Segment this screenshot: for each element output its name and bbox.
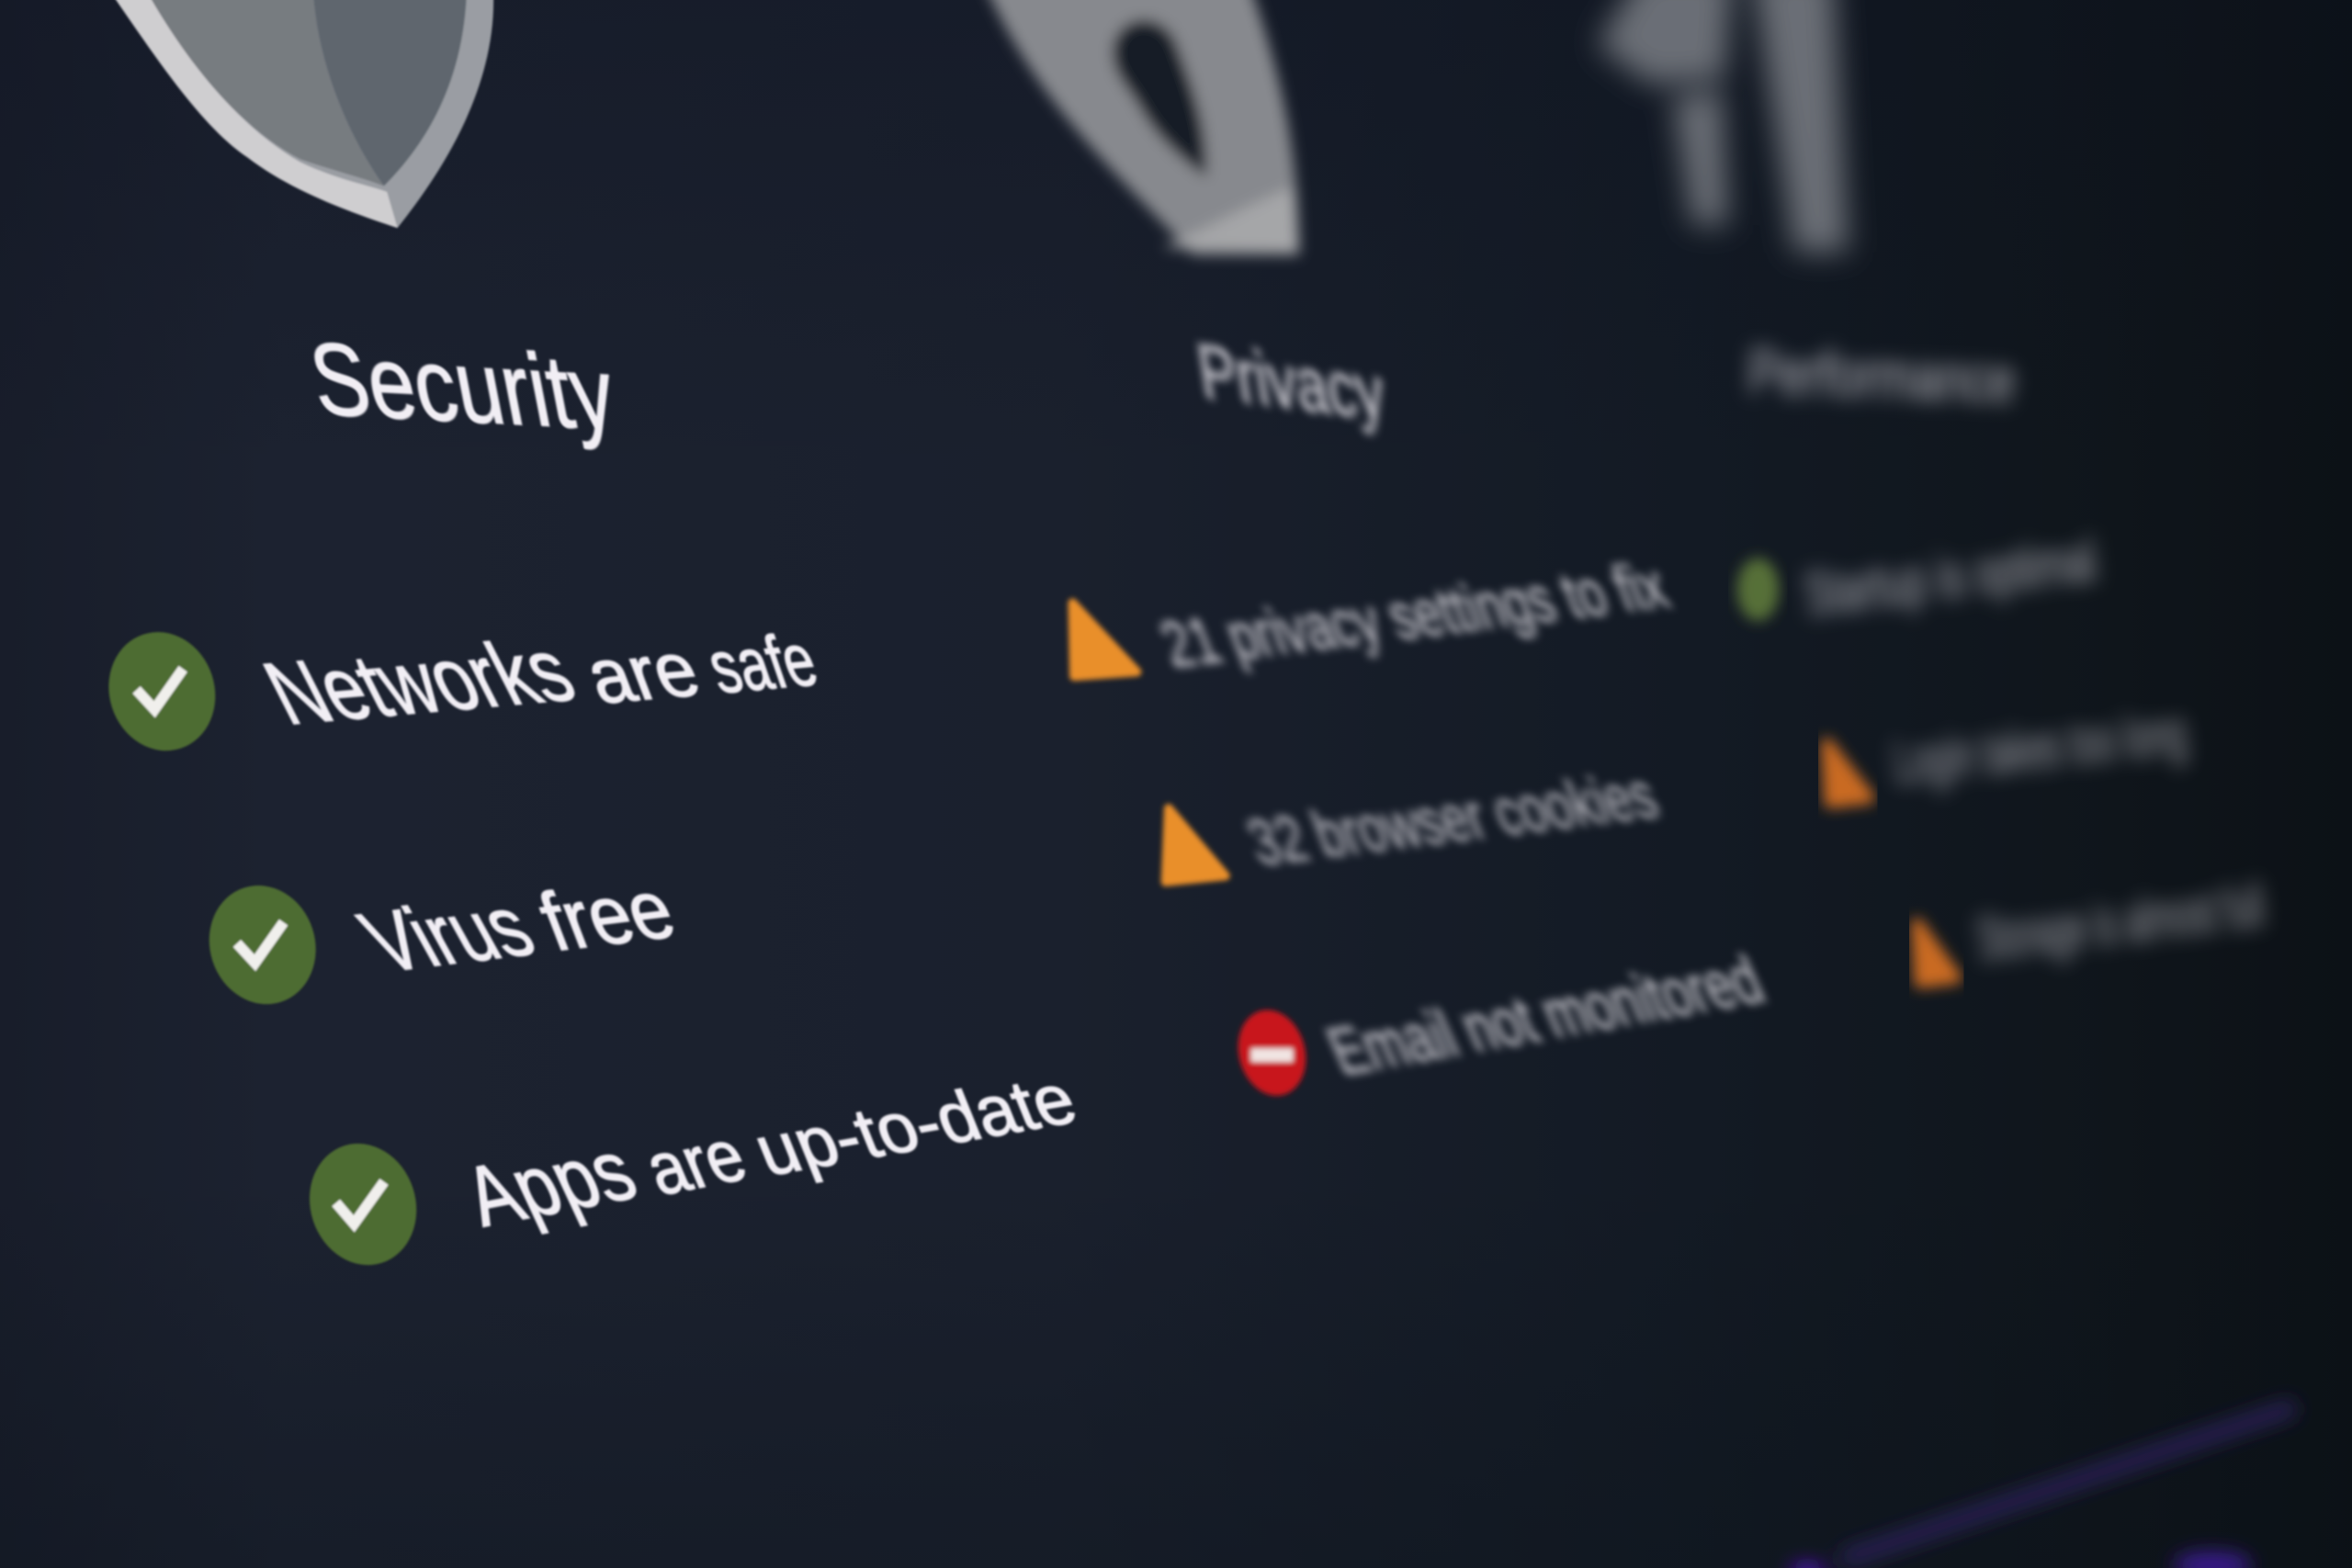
list item: login status bbox=[1827, 698, 2189, 803]
text: 21 privacy settings to fix bbox=[1151, 549, 1677, 682]
text: Virus bbox=[345, 879, 550, 989]
list item: Email not monitored bbox=[1229, 942, 1774, 1103]
text: Networks bbox=[248, 621, 591, 743]
purple graph line, out of focus bbox=[1790, 1406, 2295, 1568]
text bbox=[345, 863, 686, 989]
text: 32 browser cookies bbox=[1238, 760, 1668, 879]
icon: green check bbox=[294, 1130, 432, 1279]
list item: Virus free bbox=[194, 863, 686, 1018]
text: are bbox=[633, 1114, 758, 1211]
icon: green status dot bbox=[1737, 558, 1779, 621]
icon: orange warning bbox=[1917, 924, 1956, 982]
list item: 21 privacy settings to fix bbox=[1072, 549, 1677, 682]
text: up-to-date bbox=[743, 1058, 1087, 1190]
list item: Networks are safe bbox=[94, 618, 827, 764]
list item: 32 browser cookies bbox=[1166, 760, 1668, 882]
icon: warning triangle bbox=[1166, 808, 1226, 882]
text: Apps bbox=[449, 1123, 650, 1245]
text: Email not monitored bbox=[1317, 942, 1774, 1089]
icon: warning triangle bbox=[1072, 603, 1137, 676]
icon: orange warning bbox=[1827, 744, 1869, 803]
icon: security shield bbox=[114, 0, 493, 228]
list item: storage status bbox=[1917, 871, 2267, 982]
icon: green check bbox=[94, 618, 231, 764]
icon: red stop sign bbox=[1229, 1002, 1315, 1103]
text bbox=[449, 1058, 1087, 1245]
text: free bbox=[527, 863, 686, 968]
list item: Apps are up-to-date bbox=[294, 1058, 1087, 1279]
heading: Privacy: Privacy bbox=[1192, 328, 1390, 436]
icon: performance gauge bbox=[1598, 0, 1848, 252]
text: Startup is optimal bbox=[1801, 525, 2099, 627]
text: safe bbox=[697, 618, 827, 709]
text: are bbox=[574, 626, 711, 720]
heading: Performance: Performance bbox=[1747, 336, 2017, 416]
heading: Security: Security bbox=[301, 321, 624, 452]
list item: startup status bbox=[1737, 525, 2099, 627]
icon: green check bbox=[194, 872, 331, 1018]
icon: privacy padlock bbox=[982, 0, 1299, 255]
